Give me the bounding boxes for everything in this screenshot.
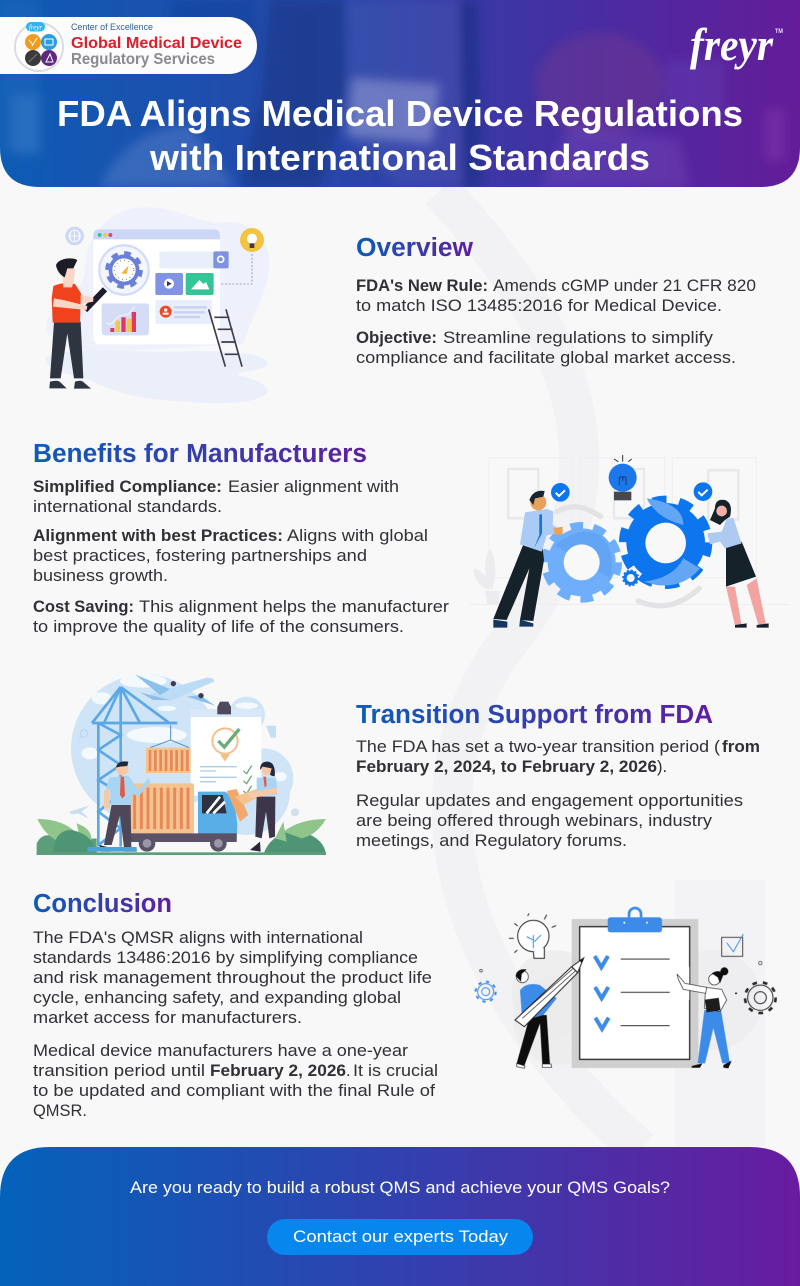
conclusion heading: Conclusion xyxy=(33,890,172,918)
illustration: analyst with magnifier and dashboard xyxy=(45,207,269,403)
contact button: Contact our experts Today xyxy=(293,1228,509,1246)
conclusion text: cycle, enhancing safety, and expanding global xyxy=(33,989,401,1007)
decorative dots xyxy=(480,961,762,994)
header blurred photo xyxy=(0,0,785,187)
globe icon xyxy=(65,227,84,245)
illustration: logistics, crane and truck xyxy=(37,674,326,855)
overview text: FDA's New Rule: xyxy=(356,277,488,295)
light gear xyxy=(545,526,618,599)
checkbox icon xyxy=(722,934,743,956)
logo text: Global Medical Device xyxy=(71,35,242,52)
man with pencil xyxy=(515,958,584,1068)
conclusion text: Medical device manufacturers have a one-year xyxy=(33,1042,409,1060)
ladder xyxy=(209,309,242,367)
freyr logo: freyr xyxy=(690,19,774,70)
section: transition support xyxy=(356,701,760,850)
benefits text: Easier alignment with xyxy=(228,478,399,496)
illustration: two people turning gears xyxy=(470,455,790,628)
transition text: from xyxy=(722,738,760,756)
background watermark swoosh xyxy=(440,190,720,1150)
overview text: Streamline regulations to simplify xyxy=(443,329,714,347)
ground shadow xyxy=(45,351,267,403)
crane hook and hanging container xyxy=(146,725,193,773)
transition text: ). xyxy=(657,758,667,776)
title xyxy=(57,93,743,178)
overview text xyxy=(356,277,756,367)
large gear xyxy=(745,982,776,1013)
woman with notebook xyxy=(677,967,732,1068)
man figure xyxy=(493,491,563,628)
airplane xyxy=(135,674,215,706)
man figure xyxy=(49,258,93,389)
benefits text: to improve the quality of life of the consumers. xyxy=(33,618,404,636)
benefits text: Alignment with best Practices: xyxy=(33,527,283,545)
conclusion text: and risk management throughout the product life xyxy=(33,969,432,987)
soft backdrop xyxy=(512,950,762,1065)
footer question: Are you ready to build a robust QMS and achieve your QMS Goals? xyxy=(130,1179,670,1197)
overview text: compliance and facilitate global market access. xyxy=(356,349,736,367)
transition text: meetings, and Regulatory forums. xyxy=(356,832,627,850)
dark gear xyxy=(623,498,708,585)
benefits text: Aligns with global xyxy=(287,527,428,545)
overview text: Amends cGMP under 21 CFR 820 xyxy=(493,277,756,295)
benefits text: Simplified Compliance: xyxy=(33,478,222,496)
conclusion text: standards 13486:2016 by simplifying compliance xyxy=(33,949,418,967)
transition text: February 2, 2024, to February 2, 2026 xyxy=(356,758,657,776)
blob backdrop xyxy=(46,207,269,353)
check badges xyxy=(551,482,712,502)
transition heading: Transition Support from FDA xyxy=(356,701,713,729)
benefits text: business growth. xyxy=(33,567,168,585)
crane xyxy=(92,687,177,847)
benefits text: This alignment helps the manufacturer xyxy=(139,598,450,616)
section: benefits for manufacturers xyxy=(33,440,450,636)
magnifier gear xyxy=(85,245,149,310)
benefits text: Cost Saving: xyxy=(33,598,134,616)
benefits text: international standards. xyxy=(33,498,222,516)
dashboard window xyxy=(93,229,229,344)
overview heading: Overview xyxy=(356,234,473,262)
small gear xyxy=(476,982,496,1002)
clipboard xyxy=(191,702,261,796)
footer banner xyxy=(0,1147,800,1286)
benefits text xyxy=(33,478,450,636)
logo text: Center of Excellence xyxy=(71,22,153,33)
conclusion text: The FDA's QMSR aligns with international xyxy=(33,929,363,947)
faded plant xyxy=(473,548,500,605)
transition text: The FDA has set a two-year transition period ( xyxy=(356,738,721,756)
conclusion text: transition period until xyxy=(33,1062,205,1080)
plants and ground xyxy=(37,819,326,855)
contact button xyxy=(267,1219,533,1255)
header banner xyxy=(0,0,800,187)
logo emblem xyxy=(15,22,63,71)
small faded icons xyxy=(69,726,299,819)
conclusion text: market access for manufacturers. xyxy=(33,1009,302,1027)
light bulb xyxy=(509,913,556,958)
light bulb xyxy=(609,455,637,500)
logo text: Regulatory Services xyxy=(71,51,215,68)
connector and light bulb xyxy=(221,228,264,284)
worker woman xyxy=(247,762,277,852)
transition text: Regular updates and engagement opportunities xyxy=(356,792,743,810)
conclusion text: . xyxy=(346,1062,351,1080)
title: FDA Aligns Medical Device Regulations xyxy=(57,93,743,134)
illustration: checklist clipboard with two people xyxy=(476,908,776,1068)
conclusion text: to be updated and compliant with the final Rule of xyxy=(33,1082,435,1100)
benefits text: best practices, fostering partnerships and xyxy=(33,547,367,565)
logo emblem: freyr xyxy=(29,24,42,32)
faded office background xyxy=(470,458,790,606)
conclusion text xyxy=(33,929,438,1120)
benefits heading: Benefits for Manufacturers xyxy=(33,440,367,468)
freyr logo: TM xyxy=(775,29,783,35)
logo badge: Center of Excellence xyxy=(0,17,257,74)
section: overview xyxy=(356,234,756,367)
overview text: Objective: xyxy=(356,329,437,347)
conclusion text: QMSR. xyxy=(33,1102,87,1120)
truck xyxy=(129,783,237,852)
clipboard xyxy=(572,908,698,1068)
logo text xyxy=(71,22,242,68)
transition text: are being offered through webinars, industry xyxy=(356,812,713,830)
sky backdrop xyxy=(71,674,293,835)
worker man xyxy=(99,761,151,852)
conclusion text: February 2, 2026 xyxy=(210,1062,346,1080)
small gear xyxy=(623,570,638,586)
overview text: to match ISO 13485:2016 for Medical Device. xyxy=(356,297,722,315)
woman figure xyxy=(707,500,769,628)
check items xyxy=(595,956,670,1029)
conclusion text: It is crucial xyxy=(353,1062,438,1080)
title: with International Standards xyxy=(149,137,650,178)
transition text xyxy=(356,738,760,850)
section: conclusion xyxy=(33,890,438,1120)
stamp xyxy=(227,787,266,822)
